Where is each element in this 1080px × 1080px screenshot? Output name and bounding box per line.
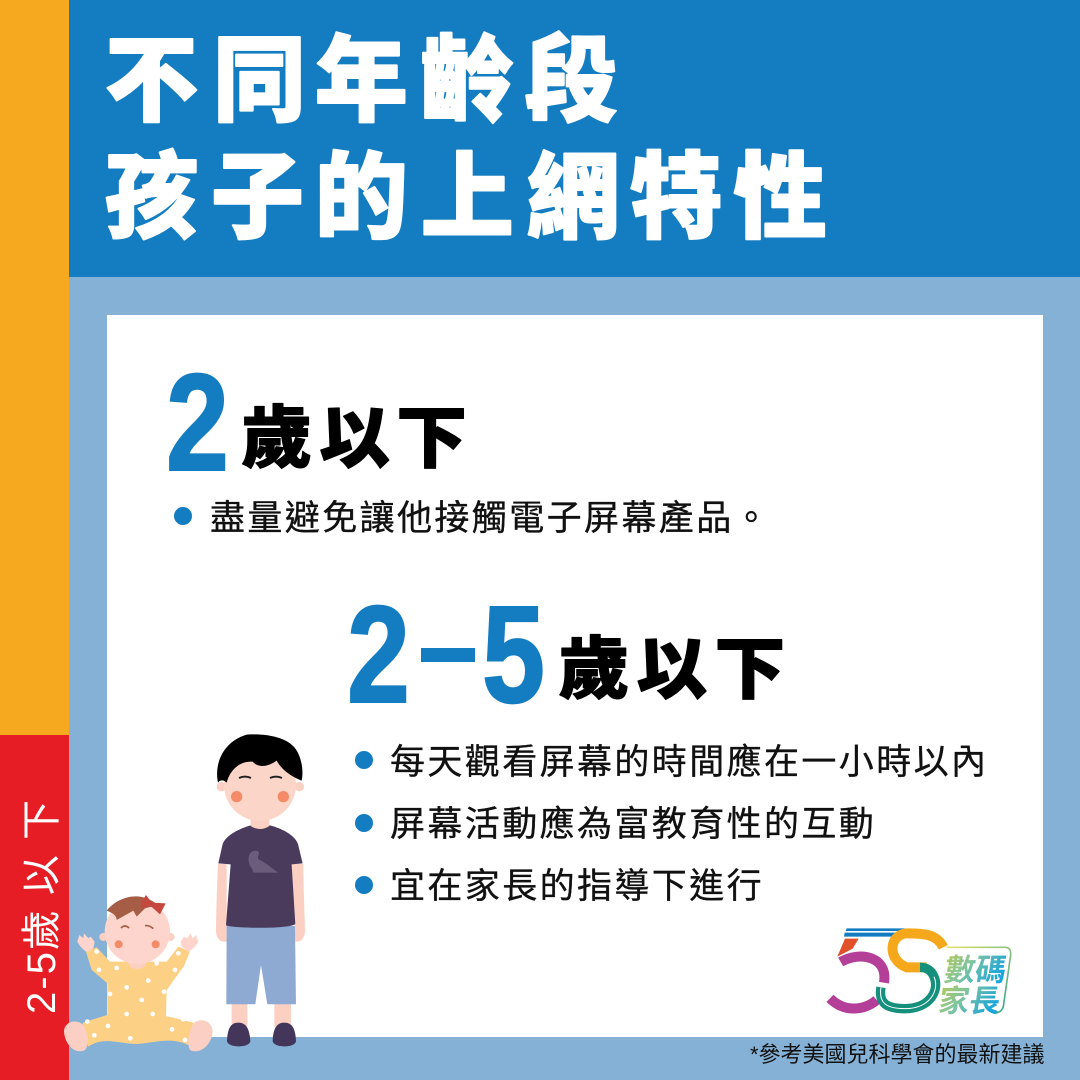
sidebar red tab (0, 735, 69, 1080)
logo numeral 55 (830, 928, 943, 1009)
range number (347, 577, 545, 732)
bullet 3 (355, 876, 373, 894)
illustration: boy (216, 734, 305, 1046)
header band (69, 0, 1080, 277)
advice 2: 屏幕活動應為富教育性的互動 (390, 805, 876, 844)
section: under 2 advice (174, 499, 771, 538)
advice 3: 宜在家長的指導下進行 (390, 867, 764, 906)
sidebar label: 2-5歲 以 下 (20, 798, 64, 1014)
bullet (174, 507, 192, 525)
range number: 5 (482, 577, 545, 732)
logo text line 2: 家長 (936, 984, 1003, 1019)
title line 2: 孩子的上網特性 (105, 145, 827, 250)
logo (830, 928, 1011, 1019)
section: ages 2 to 5 advice (355, 743, 988, 906)
bullet 2 (355, 814, 373, 832)
logo badge border (947, 947, 1011, 1013)
bullet 1 (355, 751, 373, 769)
title (105, 28, 827, 250)
sidebar orange tab (0, 0, 69, 735)
illustration: baby (64, 895, 213, 1051)
number 2: 2 (166, 345, 229, 500)
sidebar: progress tabs (0, 0, 69, 1080)
footnote: *參考美國兒科學會的最新建議 (750, 1042, 1045, 1067)
heading: under 2 (166, 345, 467, 500)
label under 2: 歲以下 (241, 400, 467, 477)
white content panel (107, 315, 1043, 1037)
heading: ages 2 to 5 (347, 577, 785, 732)
logo text line 1: 數碼 (942, 953, 1009, 988)
range number: 2 (347, 577, 410, 732)
advice text: 盡量避免讓他接觸電子屏幕產品。 (210, 499, 771, 538)
label ages 2 to 5: 歲以下 (558, 631, 785, 708)
title line 1: 不同年齡段 (105, 28, 618, 133)
advice 1: 每天觀看屏幕的時間應在一小時以內 (390, 743, 988, 782)
